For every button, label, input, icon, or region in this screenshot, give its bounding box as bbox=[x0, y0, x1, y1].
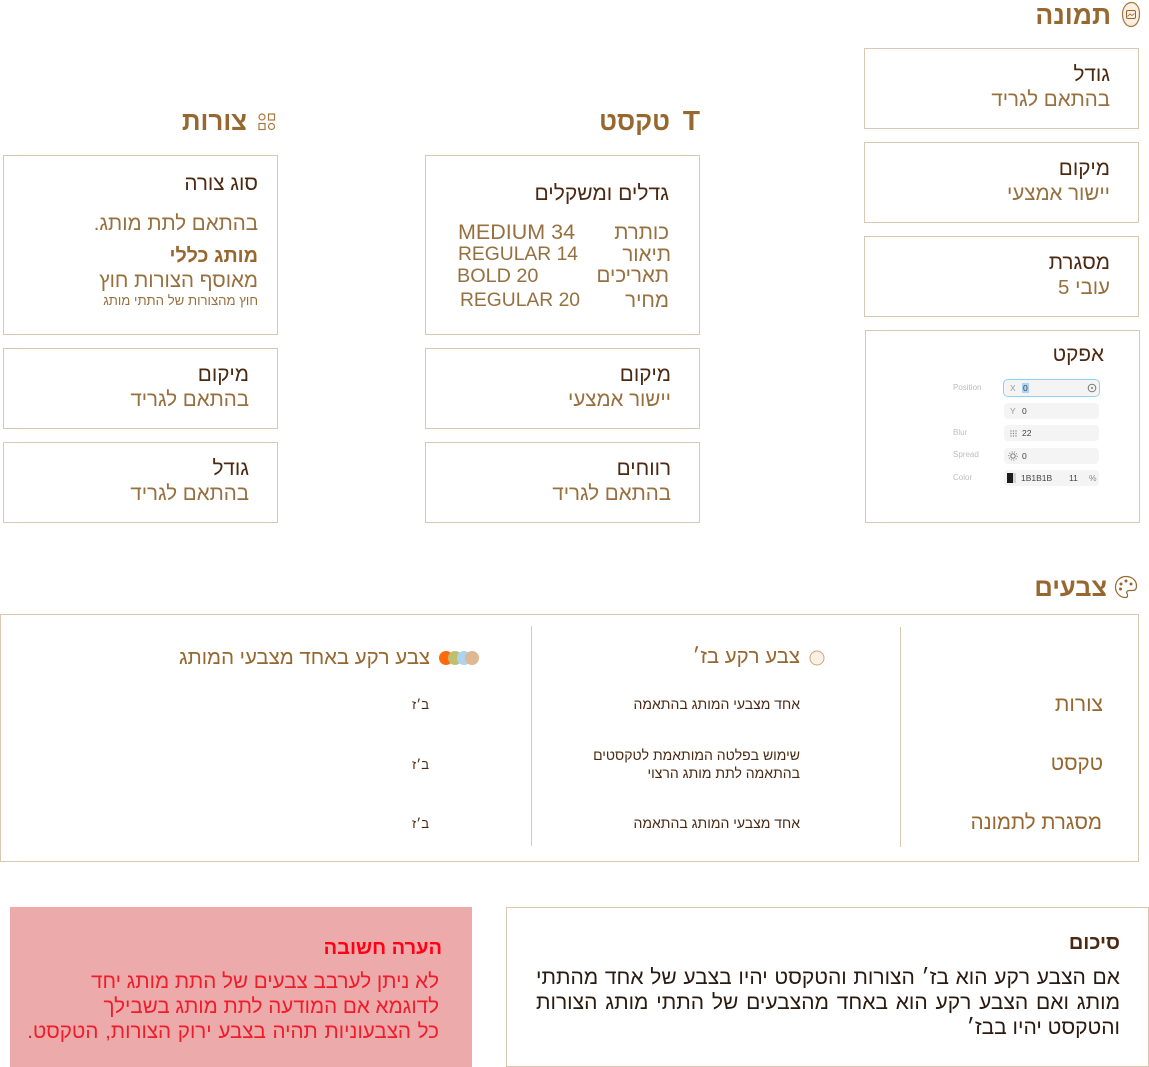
text: general brand: מותג כללי bbox=[170, 245, 258, 267]
icon: image in pebble bbox=[1122, 2, 1140, 28]
field: blur: 22 bbox=[1022, 428, 1031, 438]
label: position: Position bbox=[953, 383, 981, 392]
text: spacing value: בהתאם לגריד bbox=[552, 482, 671, 505]
cell: text on beige: בהתאמה לתת מותג הרצוי bbox=[648, 764, 800, 780]
panel: image section bbox=[864, 0, 1140, 523]
card: shape position bbox=[3, 348, 278, 429]
field: spread: 0 bbox=[1022, 451, 1027, 461]
panel: text section bbox=[425, 105, 700, 523]
icon: letter T: T bbox=[683, 105, 700, 136]
icon: shapes grid bbox=[258, 113, 276, 130]
text: dates spec: BOLD 20 bbox=[457, 265, 538, 287]
field: x: 0 bbox=[1023, 383, 1028, 393]
icon: beige dot bbox=[810, 650, 824, 666]
heading: image: תמונה bbox=[1035, 0, 1111, 30]
text: description spec: REGULAR 14 bbox=[458, 244, 578, 265]
field: y: 0 bbox=[1022, 406, 1027, 416]
label: color: Color bbox=[953, 473, 972, 482]
card: spacing bbox=[425, 442, 700, 523]
text: spacing title: רווחים bbox=[617, 457, 671, 480]
text: dates label: תאריכים bbox=[597, 264, 669, 287]
text: image border value: עובי 5 bbox=[1058, 276, 1110, 299]
row label: image frame: מסגרת לתמונה bbox=[971, 811, 1102, 834]
label: blur: Blur bbox=[953, 428, 967, 437]
text: summary body: אם הצבע רקע הוא בז׳ הצורות והטקסט יהיו בצבע של אחד מהתתי bbox=[536, 966, 1120, 989]
text: note body bbox=[27, 970, 439, 1043]
table frame bbox=[0, 614, 1139, 862]
cell: shapes on brand color: ב׳ז bbox=[412, 697, 429, 712]
row label: text: טקסט bbox=[1051, 752, 1103, 775]
field: color: 1B1B1B bbox=[1021, 473, 1052, 483]
text: image position value: יישור אמצעי bbox=[1007, 182, 1110, 205]
text: image size value: בהתאם לגריד bbox=[991, 88, 1110, 111]
text: price spec: REGULAR 20 bbox=[460, 290, 580, 311]
cell: text on beige bbox=[593, 747, 800, 780]
icon: palette bbox=[1114, 576, 1138, 598]
panel: important note bbox=[10, 907, 472, 1067]
panel: colors section bbox=[0, 574, 1139, 862]
card: image size bbox=[864, 48, 1139, 129]
heading: shapes: צורות bbox=[182, 106, 247, 136]
card: text position bbox=[425, 348, 700, 429]
field: y: Y bbox=[1010, 406, 1016, 416]
text: shape position title: מיקום bbox=[198, 363, 249, 386]
text: sizes and weights title: גדלים ומשקלים bbox=[534, 182, 669, 205]
field: spread bbox=[1004, 448, 1099, 464]
card: sizes and weights bbox=[425, 155, 700, 335]
card: image position bbox=[864, 142, 1139, 223]
text: note body: לדוגמא אם המודעה לתת מותג בשבילך bbox=[104, 995, 439, 1018]
column header: beige background: צבע רקע בז׳ bbox=[692, 646, 800, 668]
card: image effect bbox=[865, 330, 1140, 523]
text: image size title: גודל bbox=[1073, 63, 1110, 86]
card: shape type bbox=[3, 155, 278, 335]
card: shape size bbox=[3, 442, 278, 523]
field: color bbox=[1004, 470, 1099, 486]
cell: shapes on beige: אחד מצבעי המותג בהתאמה bbox=[634, 696, 800, 712]
text: note heading: הערה חשובה bbox=[324, 937, 442, 959]
text: shape type title: סוג צורה bbox=[184, 172, 258, 195]
text: headline spec: MEDIUM 34 bbox=[458, 220, 575, 244]
card: image border bbox=[864, 236, 1139, 317]
cell: text on beige: שימוש בפלטה המותאמת לטקסטים bbox=[593, 747, 800, 763]
field: x bbox=[1004, 380, 1099, 396]
text: summary body bbox=[536, 966, 1120, 1039]
cell: frame on brand color: ב׳ז bbox=[412, 816, 429, 831]
text: note body: לא ניתן לערבב צבעים של התת מותג יחד bbox=[91, 970, 439, 993]
text: text position title: מיקום bbox=[620, 363, 671, 386]
heading: text: טקסט bbox=[599, 106, 670, 136]
text: summary heading: סיכום bbox=[1069, 932, 1120, 954]
text: note body: כל הצבעוניות תהיה בצבע ירוק הצורות, הטקסט. bbox=[27, 1020, 439, 1043]
text: shape type value: בהתאם לתת מותג. bbox=[94, 212, 258, 235]
text: description label: תיאור bbox=[622, 243, 671, 266]
panel: summary bbox=[506, 907, 1149, 1067]
field: color: 11 bbox=[1069, 473, 1078, 483]
text: shape size value: בהתאם לגריד bbox=[130, 482, 249, 505]
text: image position title: מיקום bbox=[1059, 157, 1110, 180]
text: headline label: כותרת bbox=[614, 221, 669, 244]
text: general brand value: מאוסף הצורות חוץ bbox=[99, 269, 258, 292]
text: shape position value: בהתאם לגריד bbox=[130, 388, 249, 411]
field: y bbox=[1004, 403, 1099, 419]
row label: shapes: צורות bbox=[1055, 693, 1103, 716]
field: x: X bbox=[1010, 383, 1016, 393]
column header: any brand color background: צבע רקע באחד מצבעי המותג bbox=[179, 647, 430, 669]
text: text position value: יישור אמצעי bbox=[568, 388, 671, 411]
field: blur bbox=[1004, 425, 1099, 441]
panel: shapes section bbox=[3, 106, 278, 523]
text: price label: מחיר bbox=[625, 289, 669, 312]
text: summary body: מותג ואם הצבע רקע הוא באחד מהצבעים של התתי מותג הצורות bbox=[536, 991, 1120, 1014]
text: image border title: מסגרת bbox=[1049, 251, 1110, 274]
text: shape size title: גודל bbox=[212, 457, 249, 480]
text: effect title: אפקט bbox=[1053, 343, 1104, 366]
icon: brand color dots bbox=[439, 651, 479, 665]
text: general brand note: חוץ מהצורות של התתי מותג bbox=[103, 293, 258, 308]
heading: colors: צבעים bbox=[1034, 574, 1107, 602]
cell: text on brand color: ב׳ז bbox=[412, 757, 429, 772]
text: summary body: והטקסט יהיו בבז׳ bbox=[967, 1016, 1120, 1039]
label: spread: Spread bbox=[953, 450, 979, 459]
field: color: % bbox=[1089, 473, 1097, 483]
cell: frame on beige: אחד מצבעי המותג בהתאמה bbox=[634, 815, 800, 831]
